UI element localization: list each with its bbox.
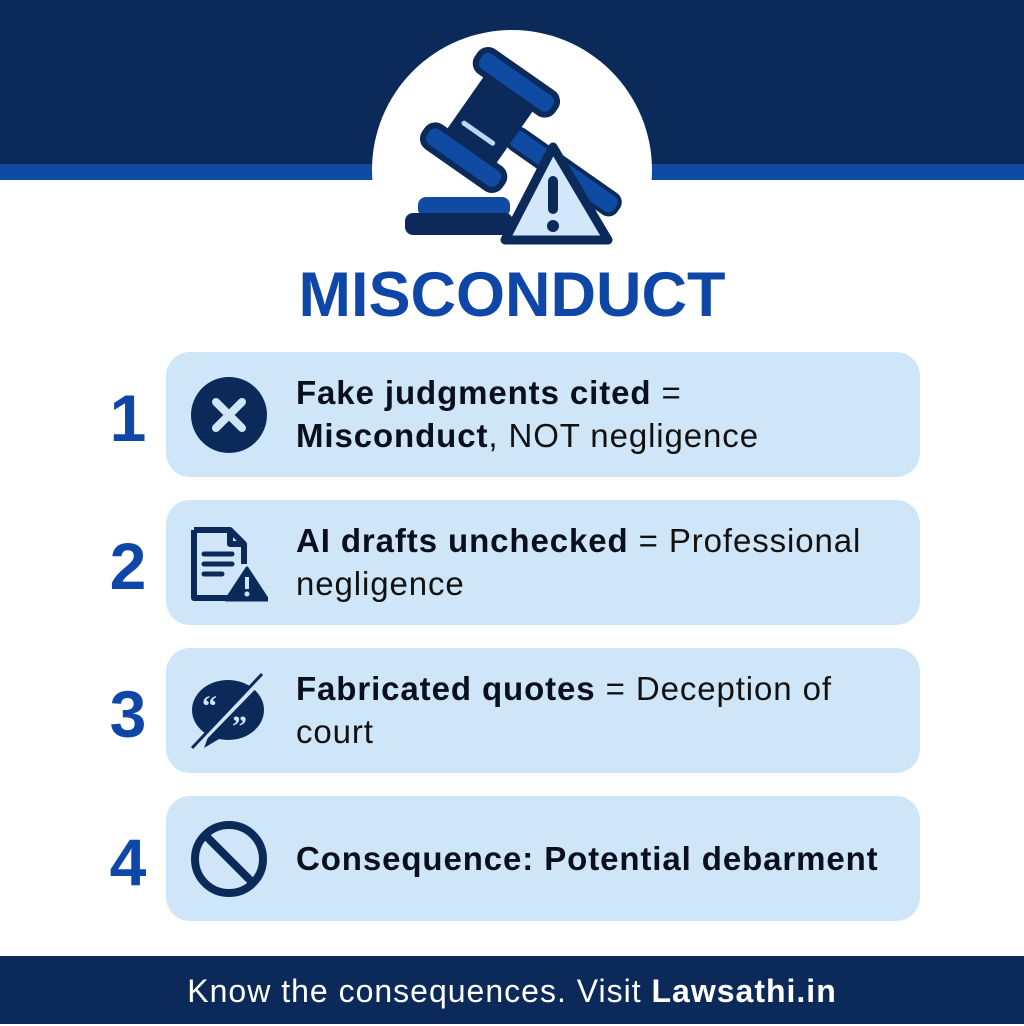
footer: Know the consequences. Visit Lawsathi.in xyxy=(187,973,837,1009)
icon: x circle xyxy=(191,377,267,453)
icon: quote bubble crossed xyxy=(191,673,264,749)
text: 4 xyxy=(110,825,146,899)
icon: quote bubble crossed: ” xyxy=(232,710,247,743)
text: 2 xyxy=(110,529,146,603)
icon: gavel xyxy=(405,46,650,256)
footer xyxy=(0,956,1024,1024)
panel: item 1: Fake judgments cited = xyxy=(296,374,682,411)
icon: document warning xyxy=(191,527,268,602)
title: MISCONDUCT xyxy=(298,260,725,330)
panel: item 3 xyxy=(166,648,920,773)
text: 3 xyxy=(110,677,146,751)
header circle with gavel icon xyxy=(372,30,652,310)
icon: prohibited xyxy=(191,821,267,897)
panel: item 4: Consequence: Potential debarment xyxy=(296,840,879,877)
icon: quote bubble crossed: “ xyxy=(202,690,217,723)
panel: item 4 xyxy=(166,796,920,921)
panel: item 1 xyxy=(166,352,920,477)
icon: warning triangle xyxy=(505,147,608,240)
panel: item 2: negligence xyxy=(296,565,465,602)
text: 1 xyxy=(110,381,146,455)
panel: item 2: AI drafts unchecked = Professional xyxy=(296,522,861,559)
panel: item 3: court xyxy=(296,713,374,750)
header band xyxy=(0,0,1024,180)
panel: item 3: Fabricated quotes = Deception of xyxy=(296,670,832,707)
panel: item 2 xyxy=(166,500,920,625)
panel: item 1: Misconduct, NOT negligence xyxy=(296,417,759,454)
